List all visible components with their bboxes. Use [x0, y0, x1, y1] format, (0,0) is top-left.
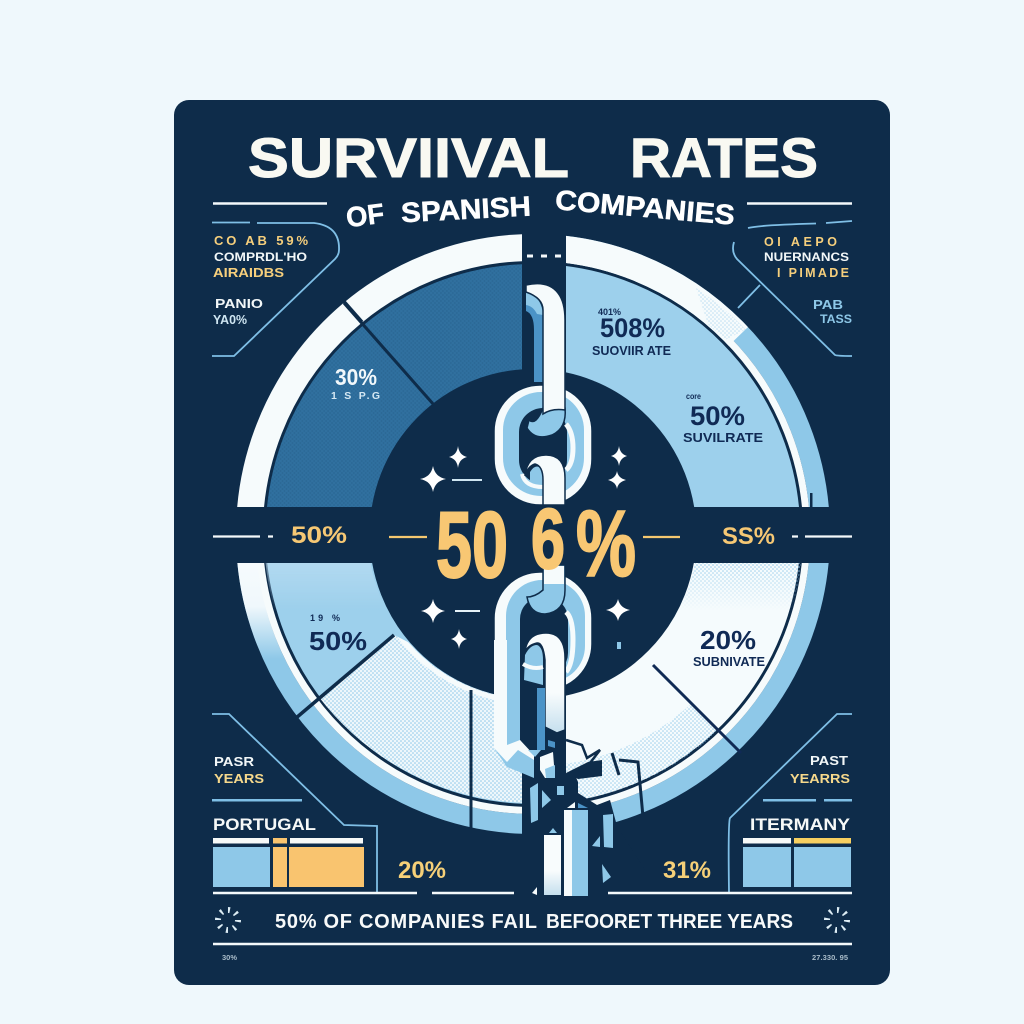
panel: dark card — [174, 100, 890, 985]
footnotes — [222, 953, 848, 962]
callout: top left: CO AB 59% — [214, 233, 308, 248]
panel: Portugal: PORTUGAL — [213, 815, 316, 834]
chain link 5 — [523, 633, 565, 750]
footnotes: 27.330. 95 — [812, 953, 848, 962]
label: 20% survive — [693, 625, 765, 669]
value: 20%: 20% — [398, 857, 446, 884]
panel: top-right quadrant — [566, 236, 829, 507]
panel: Germany: YEARRS — [790, 771, 850, 786]
value: 31%: 31% — [663, 857, 711, 884]
callout: top right: PAB — [813, 298, 843, 312]
footer statement: BEFOORET THREE YEARS — [546, 911, 793, 933]
headline figure: 6 — [531, 492, 565, 587]
title — [248, 126, 818, 189]
label: 20% survive: 20% — [700, 625, 756, 655]
icon: left burst — [218, 910, 238, 930]
chain link 2 ring — [494, 385, 592, 505]
infographic — [174, 100, 890, 985]
label: 50% survival rate: core — [686, 391, 701, 401]
chain link 4 hook — [527, 565, 565, 614]
callout: top right — [733, 204, 852, 356]
title: RATES — [630, 126, 818, 189]
callout: top left: AIRAIDBS — [213, 266, 284, 280]
chain debris — [528, 740, 613, 896]
label: 50% survival rate: SUVILRATE — [683, 430, 763, 445]
chain link 1 — [526, 284, 565, 437]
callout: top right: I PIMADE — [777, 266, 849, 280]
panel: Germany: PAST — [810, 753, 848, 768]
footnotes: 30% — [222, 953, 237, 962]
label: 50.8% survival: SUOVIIR ATE — [592, 343, 671, 358]
footer statement — [275, 911, 793, 933]
label: 50% segment lower left: 19 % — [310, 613, 340, 623]
icon: right burst — [827, 910, 847, 930]
row: middle percentages: 50% — [291, 522, 347, 549]
panel: bottom-left quadrant — [237, 563, 522, 834]
label: 20% survive: SUBNIVATE — [693, 655, 765, 669]
callout: top left — [212, 204, 339, 356]
crack: breaking ring — [566, 740, 645, 870]
callout: top right: TASS — [820, 314, 852, 326]
panel: Germany: ITERMANY — [750, 815, 851, 834]
panel: Portugal — [212, 714, 377, 892]
callout: top right: OI AEPO — [764, 235, 837, 249]
footer statement: 50% OF COMPANIES FAIL — [275, 911, 537, 933]
headline figure: % — [576, 491, 636, 596]
callout: top right: NUERNANCS — [764, 252, 849, 264]
subtitle — [344, 184, 736, 233]
rules at foot — [213, 893, 852, 944]
panel: Portugal: YEARS — [214, 771, 264, 786]
callout: top left: COMPRDL'HO — [214, 252, 307, 264]
dashes above chain — [527, 254, 561, 258]
panel: Germany — [729, 714, 852, 892]
label: 50% survival rate: 50% — [690, 401, 745, 431]
label: 50% segment lower left: 50% — [309, 626, 367, 656]
chain link 4 ring — [494, 572, 592, 778]
callout: top left: PANIO — [215, 297, 263, 311]
icon: broken chain — [494, 284, 613, 896]
label: 50.8% survival: 401% — [598, 307, 621, 317]
label: 50% survival rate — [683, 391, 763, 445]
panel: bottom-right quadrant — [566, 563, 829, 822]
headline figure — [436, 491, 636, 597]
subtitle: COMPANIES — [554, 184, 736, 231]
label: 50.8% survival: 508% — [600, 313, 665, 343]
row: middle percentages — [213, 522, 852, 550]
icons: sparkles — [420, 446, 630, 649]
callout: top left: YA0% — [213, 313, 247, 327]
title: SURVIIVAL — [248, 126, 569, 189]
subtitle: OF — [344, 198, 386, 233]
subtitle: SPANISH — [400, 191, 532, 228]
panel: top-left quadrant — [237, 234, 522, 507]
label: 30% segment: 30% — [335, 364, 377, 390]
label: 50.8% survival — [592, 307, 671, 358]
label: 30% segment: 1 S P.G — [331, 390, 380, 402]
chain link 3 — [522, 455, 565, 505]
label: 30% segment — [331, 364, 380, 402]
label: 50% segment lower left — [309, 613, 367, 656]
row: middle percentages: SS% — [722, 523, 775, 550]
panel: Portugal: PASR — [214, 754, 255, 769]
headline figure: 50 — [436, 492, 508, 597]
